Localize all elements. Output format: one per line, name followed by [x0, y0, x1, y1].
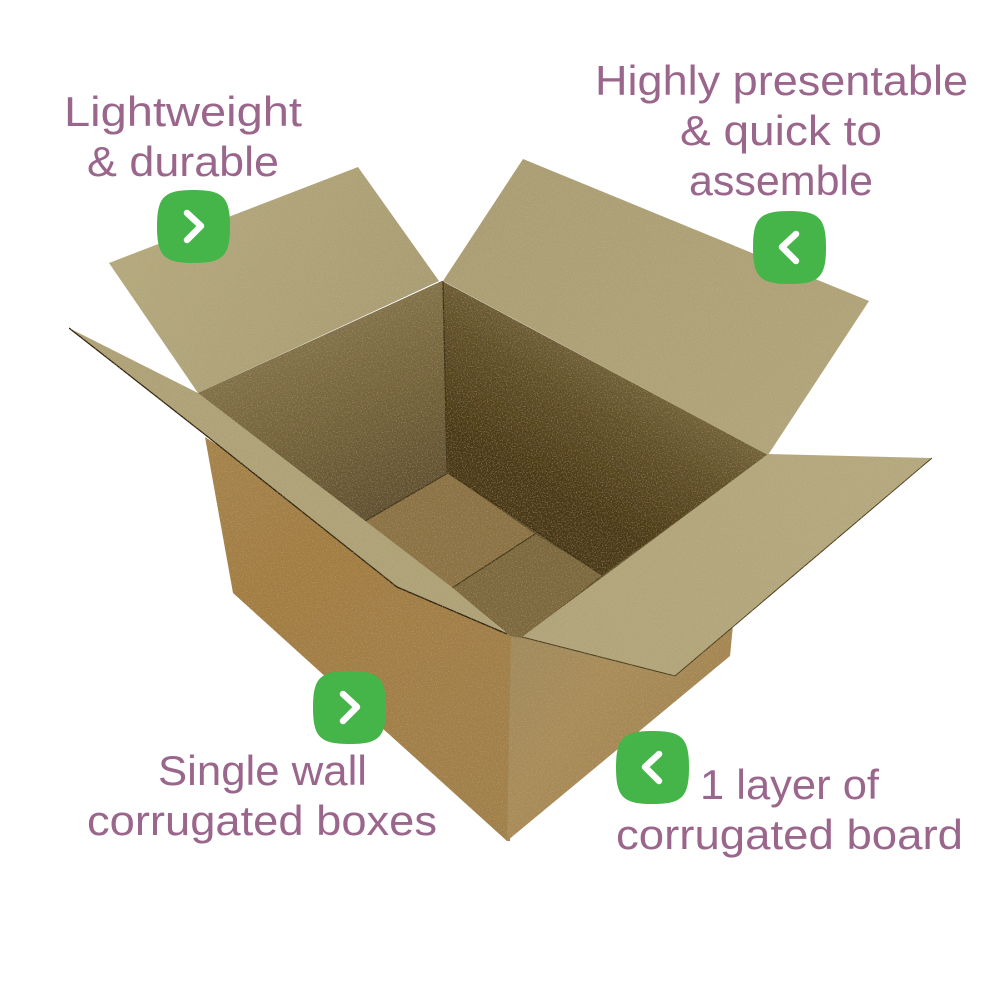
- callout: highly presentable: [595, 57, 968, 284]
- left flap: [69, 328, 507, 634]
- box interior base: [198, 281, 768, 637]
- cardboard box: [69, 159, 932, 841]
- label: Lightweight: [64, 88, 302, 135]
- box right outer wall: [507, 625, 733, 841]
- callout: highly presentable: & quick to: [680, 107, 882, 154]
- icon: left chevron: [753, 211, 826, 284]
- icon: right chevron: [157, 190, 230, 263]
- right flap: [522, 454, 932, 676]
- callout: single wall: corrugated boxes: [87, 797, 437, 844]
- callout: one layer: [616, 731, 963, 858]
- label: 1 layer of: [700, 761, 879, 808]
- right flap dark edge: [522, 458, 932, 676]
- inner right wall: [442, 281, 768, 575]
- floor and corner creases: [365, 281, 602, 588]
- inner left wall: [198, 281, 448, 521]
- box floor: [365, 473, 535, 588]
- callout: lightweight and durable: [64, 88, 302, 263]
- callout: one layer: corrugated board: [616, 811, 963, 858]
- box left outer wall: [205, 437, 512, 841]
- callout: highly presentable: assemble: [689, 157, 873, 204]
- left flap dark edge: [69, 328, 507, 634]
- callout: single wall: [87, 671, 437, 844]
- icon: left chevron: [616, 731, 689, 804]
- top right flap: [443, 159, 869, 455]
- label: Single wall: [158, 747, 367, 794]
- label: Highly presentable: [595, 57, 968, 104]
- top left flap: [109, 167, 439, 393]
- icon: right chevron: [313, 671, 386, 744]
- callout: lightweight and durable: & durable: [87, 138, 279, 185]
